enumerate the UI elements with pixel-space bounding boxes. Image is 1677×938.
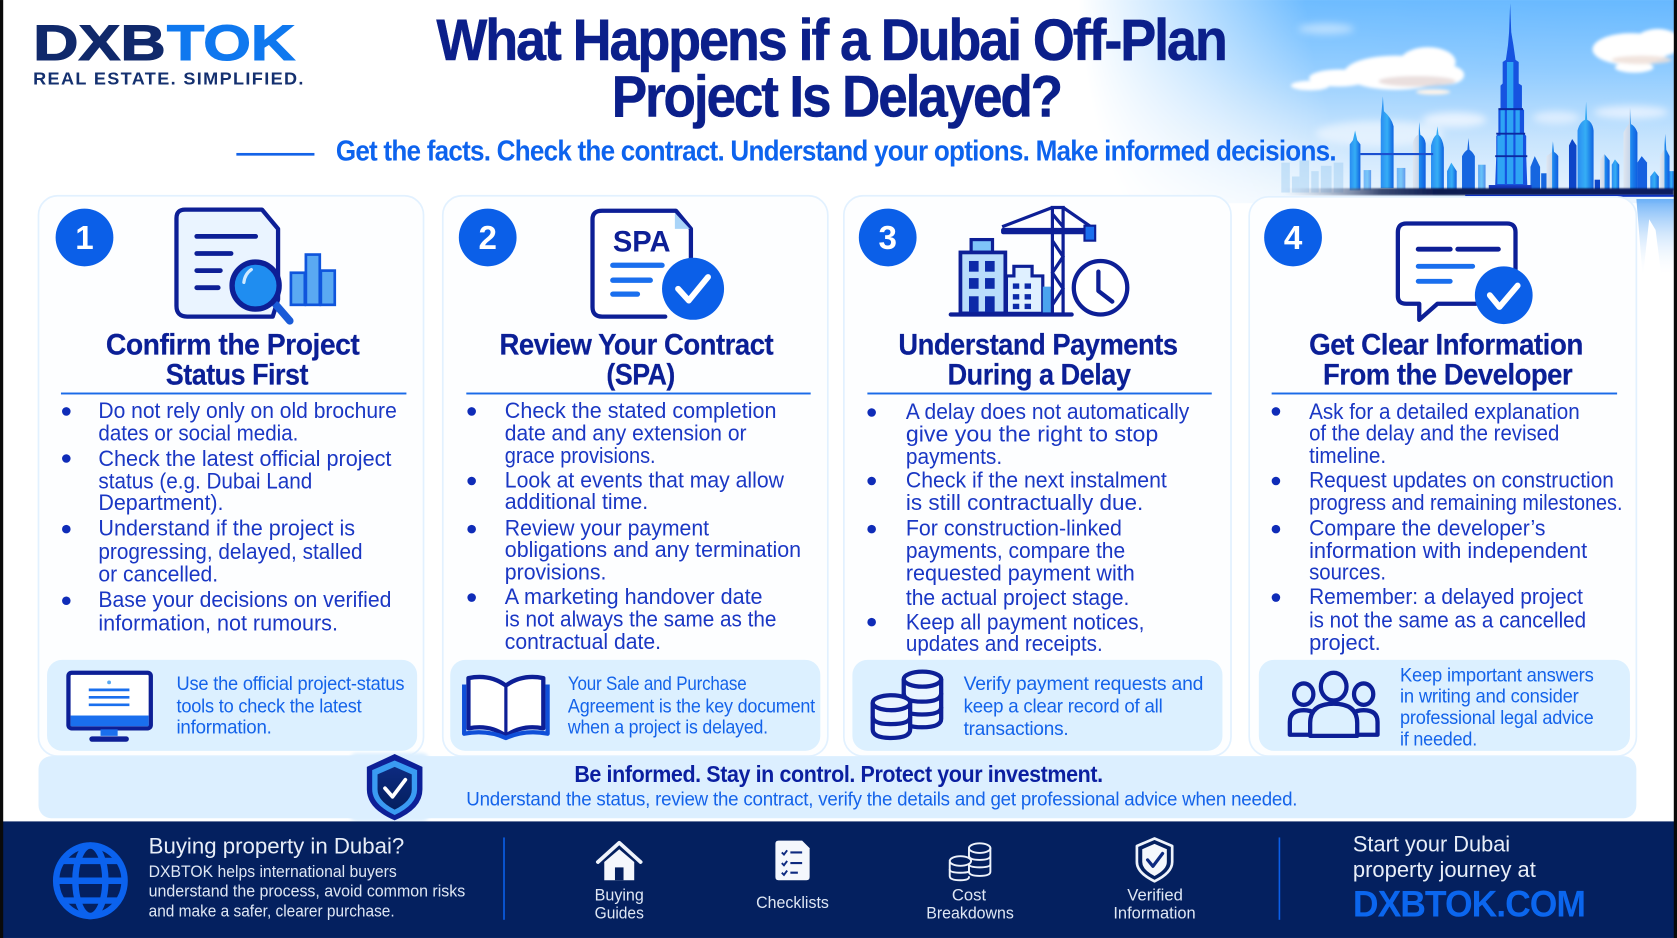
- step number 2: 2: [478, 220, 497, 257]
- bullet list: Check if the next instalment: [906, 467, 1167, 492]
- burj khalifa tower: [1489, 3, 1532, 190]
- callout: verify payments: keep a clear record of all: [964, 695, 1163, 717]
- logo: REAL ESTATE. SIMPLIFIED.: [33, 70, 305, 89]
- heading: Review Your Contract: [499, 328, 774, 361]
- bullet list: requested payment with: [906, 560, 1135, 585]
- bullet list: give you the right to stop: [906, 421, 1158, 446]
- bullet list: information with independent: [1309, 538, 1587, 563]
- footer intro text: DXBTOK helps international buyers: [149, 862, 397, 881]
- bullet list: date and any extension or: [505, 420, 747, 445]
- callout: key document: Agreement is the key document: [568, 695, 816, 717]
- bullet list: Understand if the project is: [98, 516, 355, 541]
- bullet list: Check the stated completion: [505, 398, 776, 423]
- bullet list: is not always the same as the: [505, 606, 776, 631]
- footer intro text: understand the process, avoid common risks: [149, 881, 465, 900]
- item: cost breakdowns: Breakdowns: [926, 904, 1014, 923]
- callout: official tools: Use the official project-status: [176, 673, 405, 695]
- footer intro text: and make a safer, clearer purchase.: [149, 902, 395, 921]
- item: cost breakdowns: [926, 843, 1014, 923]
- step number 2: [459, 209, 517, 266]
- bullet list: is still contractually due.: [906, 490, 1143, 515]
- bullet list: grace provisions.: [505, 443, 656, 468]
- bullet list: provisions.: [505, 559, 606, 584]
- call to action: property journey at: [1353, 857, 1536, 882]
- callout: verify payments: [852, 660, 1222, 751]
- bullet list: dates or social media.: [98, 420, 298, 445]
- logo: TOK: [167, 15, 295, 71]
- icon: document with magnifier and bars: [176, 210, 335, 321]
- item: checklists: Checklists: [756, 893, 829, 912]
- bullet list: progress and remaining milestones.: [1309, 490, 1622, 515]
- bullet list: updates and receipts.: [906, 631, 1103, 656]
- panel: step 4: [1249, 197, 1636, 756]
- bullet list: For construction-linked: [906, 516, 1122, 541]
- bullet list: [1272, 399, 1622, 655]
- bullet list: Department).: [98, 490, 224, 515]
- bullet list: progressing, delayed, stalled: [98, 539, 363, 564]
- footer intro text: [149, 833, 465, 921]
- bullet list: contractual date.: [505, 629, 661, 654]
- callout: verify payments: transactions.: [964, 718, 1068, 740]
- callout: keep answers: if needed.: [1400, 728, 1477, 750]
- call to action: Start your Dubai: [1353, 831, 1510, 856]
- panel: step 3: [844, 196, 1231, 756]
- callout: keep answers: [1259, 660, 1630, 751]
- bullet list: Remember: a delayed project: [1309, 584, 1583, 609]
- bullet list: Compare the developer’s: [1309, 516, 1545, 541]
- callout: key document: when a project is delayed.: [567, 717, 768, 739]
- step number 4: [1264, 209, 1322, 266]
- item: buying guides: [595, 843, 644, 923]
- bullet list: [867, 399, 1189, 656]
- heading: [499, 328, 774, 391]
- bullet list: status (e.g. Dubai Land: [98, 468, 312, 493]
- bullet list: Look at events that may allow: [505, 467, 784, 492]
- bullet list: payments, compare the: [906, 538, 1125, 563]
- heading: During a Delay: [948, 358, 1131, 391]
- skyline header image: [1092, 0, 1674, 260]
- title: Project Is Delayed?: [612, 65, 1061, 130]
- logo: [33, 15, 305, 89]
- item: buying guides: Buying: [595, 886, 644, 905]
- bullet list: Ask for a detailed explanation: [1309, 399, 1580, 424]
- heading: Get Clear Information: [1309, 328, 1583, 361]
- callout: key document: [450, 660, 820, 751]
- bullet list: timeline.: [1309, 443, 1386, 468]
- banner: be informed: Understand the status, review the contract, verify the details and get professional advice when needed.: [466, 788, 1297, 810]
- step number 4: 4: [1284, 220, 1303, 257]
- heading: [106, 328, 360, 391]
- footer: [0, 821, 1677, 938]
- bullet list: payments.: [906, 444, 1002, 469]
- bullet list: or cancelled.: [98, 562, 218, 587]
- bullet list: obligations and any termination: [505, 537, 801, 562]
- title: [436, 8, 1226, 130]
- bullet list: sources.: [1309, 559, 1386, 584]
- bullet list: information, not rumours.: [98, 611, 338, 636]
- icon: globe: [56, 845, 125, 916]
- step number 3: [859, 209, 917, 266]
- banner: be informed: Be informed. Stay in control. Protect your investment.: [574, 761, 1103, 787]
- callout: official tools: tools to check the latest: [176, 695, 362, 717]
- bullet list: [62, 398, 397, 636]
- bullet list: of the delay and the revised: [1309, 420, 1559, 445]
- footer intro text: Buying property in Dubai?: [149, 833, 404, 858]
- bullet list: [467, 398, 801, 654]
- call to action: [1353, 831, 1585, 925]
- icon: shield with check: [367, 754, 422, 820]
- icon: coin stacks: [873, 672, 941, 738]
- bullet list: project.: [1309, 630, 1381, 655]
- panel: step 1: [39, 196, 424, 756]
- item: verified information: [1113, 839, 1196, 923]
- callout: keep answers: professional legal advice: [1400, 707, 1594, 729]
- heading: From the Developer: [1323, 358, 1573, 391]
- bullet list: Check the latest official project: [98, 446, 391, 471]
- item: buying guides: Guides: [595, 904, 644, 923]
- subtitle: Get the facts. Check the contract. Understand your options. Make informed decisions.: [336, 135, 1336, 167]
- bullet list: the actual project stage.: [906, 585, 1129, 610]
- icon: open book: [464, 677, 548, 738]
- heading: Understand Payments: [898, 328, 1178, 361]
- panel: step 2: [443, 196, 828, 756]
- step number 3: 3: [878, 220, 897, 257]
- callout: key document: Your Sale and Purchase: [568, 673, 747, 695]
- item: verified information: Information: [1113, 904, 1196, 923]
- icon: SPA document with check: SPA: [613, 225, 671, 258]
- heading: Status First: [166, 358, 309, 391]
- callout: keep answers: in writing and consider: [1400, 686, 1579, 708]
- step number 1: [56, 209, 113, 266]
- bullet list: A marketing handover date: [505, 584, 763, 609]
- callout: official tools: [47, 660, 417, 751]
- bullet list: Review your payment: [505, 516, 709, 541]
- icon: SPA document with check: [593, 211, 724, 320]
- icon: monitor: [68, 673, 151, 739]
- callout: keep answers: Keep important answers: [1400, 664, 1594, 686]
- logo: DXB: [33, 15, 166, 71]
- bullet list: additional time.: [505, 489, 648, 514]
- call to action: DXBTOK.COM: [1353, 883, 1585, 925]
- bullet list: Keep all payment notices,: [906, 610, 1144, 635]
- item: verified information: Verified: [1127, 886, 1183, 905]
- heading: [1309, 328, 1583, 391]
- heading: Confirm the Project: [106, 328, 360, 361]
- step number 1: 1: [75, 220, 94, 257]
- heading: [898, 328, 1178, 391]
- callout: verify payments: Verify payment requests and: [964, 673, 1203, 695]
- banner: be informed: [39, 753, 1636, 821]
- bullet list: Request updates on construction: [1309, 467, 1614, 492]
- icon: people group: [1290, 673, 1378, 736]
- heading: (SPA): [606, 358, 675, 391]
- bullet list: is not the same as a cancelled: [1309, 608, 1586, 633]
- callout: official tools: information.: [176, 717, 272, 739]
- bullet list: A delay does not automatically: [906, 399, 1189, 424]
- item: cost breakdowns: Cost: [952, 886, 986, 905]
- title: What Happens if a Dubai Off-Plan: [436, 8, 1226, 73]
- item: checklists: [756, 841, 829, 912]
- icon: buildings, crane and clock: [949, 208, 1127, 317]
- bullet list: Base your decisions on verified: [98, 587, 391, 612]
- bullet list: Do not rely only on old brochure: [98, 398, 397, 423]
- icon: speech bubble with check: [1398, 224, 1533, 324]
